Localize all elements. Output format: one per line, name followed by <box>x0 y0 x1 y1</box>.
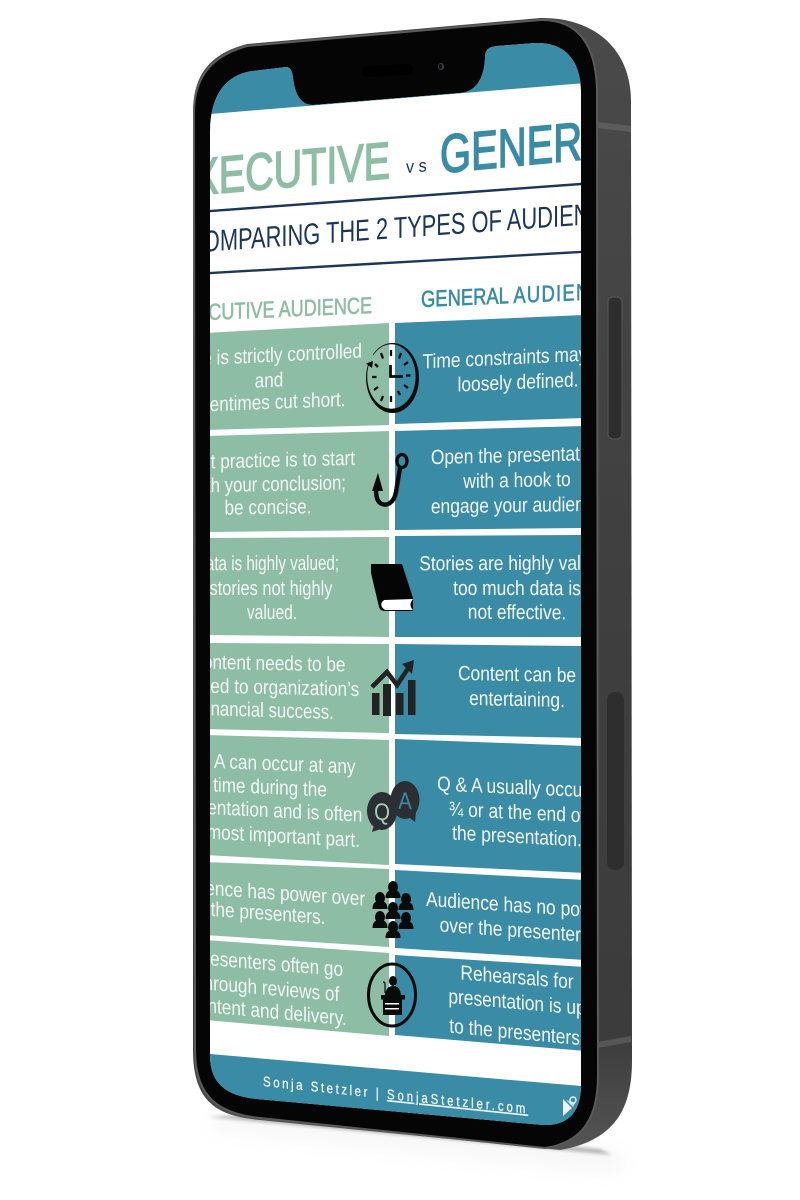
side button <box>608 297 622 439</box>
general text: Stories are highly valued; <box>419 552 615 576</box>
phone body <box>193 18 632 1150</box>
executive text: be concise. <box>224 496 312 520</box>
executive text: financial success. <box>202 696 334 723</box>
title: EXECUTIVE <box>166 131 390 209</box>
general text: Audience has no power <box>426 889 609 924</box>
general text: engage your audience <box>431 493 603 519</box>
footer text: Sonja Stetzler | SonjaStetzler.com <box>263 1073 528 1117</box>
antenna band bottom <box>597 1036 631 1048</box>
column heading: general: GENERAL AUDIENCE <box>421 278 619 313</box>
panel: general rows <box>395 315 585 1051</box>
general text: Open the presentation <box>431 443 603 470</box>
icon: Q and A bubbles: A <box>398 787 412 815</box>
executive text: Time is strictly controlled <box>174 340 362 372</box>
icon: Q and A bubbles: Q <box>374 798 390 826</box>
executive text: Content needs to be <box>190 651 346 677</box>
executive text: presentation and is often <box>174 795 362 827</box>
phone bezel <box>194 20 598 1148</box>
executive text: time during the <box>213 774 327 802</box>
general text: not effective. <box>468 601 566 625</box>
executive text: stories not highly <box>210 576 333 600</box>
general text: Rehearsals for <box>460 962 574 994</box>
icon: clock <box>363 343 419 413</box>
clock arrowhead <box>366 361 373 368</box>
executive text <box>210 342 365 1028</box>
icon: book <box>371 564 413 611</box>
executive text: valued. <box>247 601 297 624</box>
general text: over the presenters. <box>440 914 594 948</box>
panel: executive rows <box>205 323 389 1036</box>
general text: to the presenters. <box>449 1015 585 1051</box>
footer band <box>205 1054 585 1130</box>
general text: too much data is <box>453 578 581 601</box>
subtitle with rules <box>210 182 581 274</box>
general text: the presentation. <box>452 822 582 852</box>
subtitle text: COMPARING THE 2 TYPES OF AUDIENCES <box>187 194 634 260</box>
title <box>210 122 581 194</box>
antenna band top <box>597 122 631 132</box>
general text: Time constraints may be <box>423 342 611 374</box>
notch hardware <box>362 63 444 77</box>
icon: presenter at podium <box>368 964 416 1026</box>
lower side slot <box>607 692 624 870</box>
column heading: executive: EXECUTIVE AUDIENCE <box>172 293 372 327</box>
screen <box>210 43 581 1125</box>
camera <box>438 63 444 70</box>
icon: growth chart <box>372 660 416 716</box>
general text: entertaining. <box>469 688 565 712</box>
general text: loosely defined. <box>458 369 578 397</box>
general text: ¾ or at the end of <box>449 798 586 828</box>
icon: Q and A bubbles <box>367 781 420 832</box>
general text: with a hook to <box>462 469 571 493</box>
executive text: Q & A can occur at any <box>180 749 356 779</box>
executive text: Data is highly valued; <box>195 552 339 575</box>
general text: presentation is up <box>448 986 586 1020</box>
executive text: the most important part. <box>178 820 360 852</box>
executive text: related to organization’s <box>177 675 359 701</box>
screen background <box>205 40 585 1130</box>
general text: Content can be <box>458 663 576 687</box>
executive text: Presenters often go <box>193 947 343 982</box>
clock hands <box>390 365 403 376</box>
general text <box>420 348 581 1045</box>
executive text: Audience has power over <box>171 875 365 911</box>
header band <box>205 40 585 114</box>
floor shadow <box>205 1115 620 1170</box>
clock arc gap <box>363 352 373 365</box>
executive text: oftentimes cut short. <box>191 389 345 417</box>
executive text: content and delivery. <box>189 993 347 1031</box>
executive text: with your conclusion; <box>189 471 346 497</box>
executive text: the presenters. <box>211 899 325 930</box>
executive text: through reviews of <box>199 972 340 1007</box>
general: GENERAL <box>440 107 631 185</box>
vs: vs <box>406 154 431 177</box>
footer logo <box>563 1097 576 1116</box>
icon: fish hook <box>372 454 407 505</box>
clock ticks <box>372 350 410 402</box>
executive text: and <box>255 369 283 393</box>
general text: Q & A usually occurs <box>437 773 597 803</box>
executive text: Best practice is to start <box>181 447 356 475</box>
icon: audience <box>372 881 414 938</box>
